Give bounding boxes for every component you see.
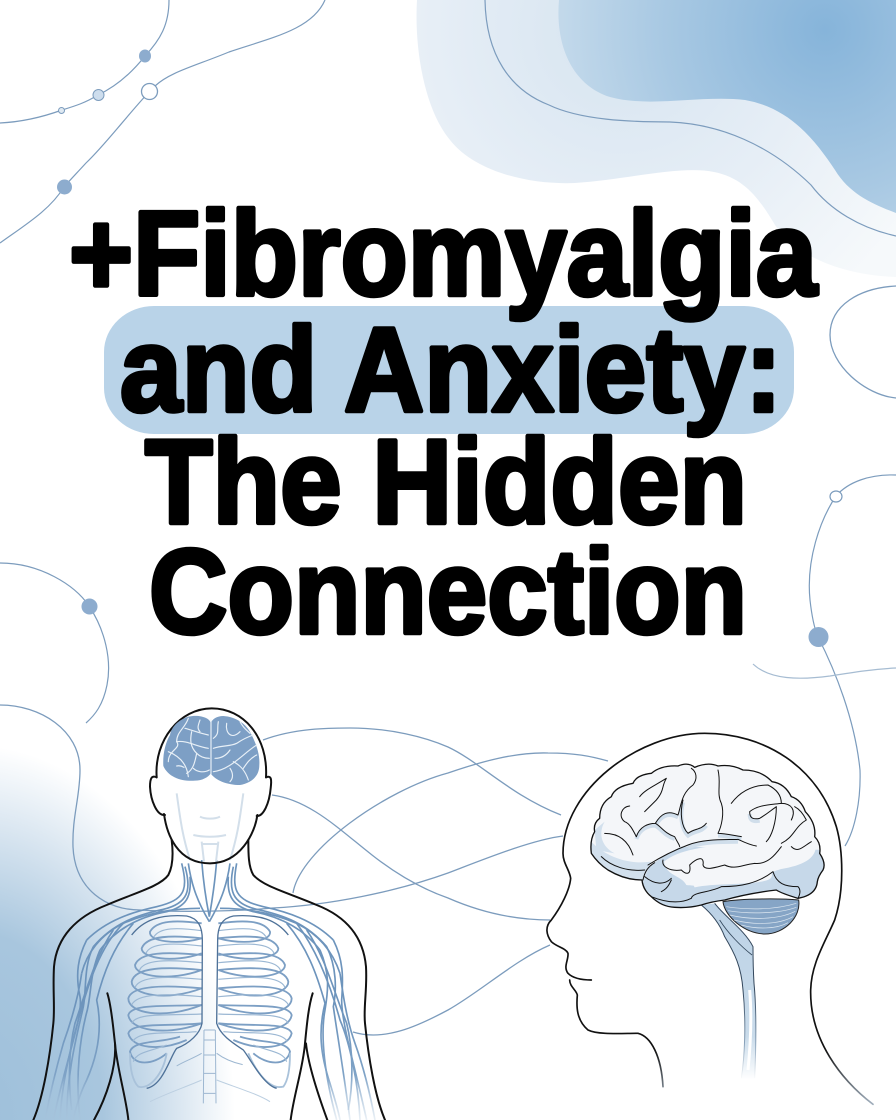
network line and nodes: right lower [753, 475, 896, 846]
connection lines between body and head [0, 705, 608, 1035]
blue wave: top right inner [558, 0, 896, 213]
figure: human body with nervous system [33, 708, 385, 1120]
cerebrum [590, 764, 828, 913]
title: The Hidden [145, 415, 747, 549]
head profile outline [547, 733, 873, 1104]
title: +Fibromyalgia [69, 187, 818, 321]
network lines and nodes: top left [0, 0, 325, 243]
cerebrum outline [591, 764, 824, 908]
network line: top right [485, 0, 896, 236]
figure: head profile with brain [547, 733, 873, 1104]
network line and node: left middle [0, 563, 109, 723]
spine [150, 1030, 270, 1103]
blue wave: top right outer [417, 0, 896, 277]
title: and Anxiety: [120, 303, 782, 437]
network loop: right upper [830, 286, 896, 398]
ribs: right side [218, 921, 292, 1087]
title: Connection [149, 525, 747, 659]
title [69, 187, 818, 659]
nerves: arms [45, 923, 375, 1120]
chest contour and sternum [132, 916, 288, 1088]
nerves: neck and shoulders [82, 860, 340, 973]
gyri lines [601, 768, 811, 902]
title highlight pill [104, 306, 794, 434]
body outline [33, 708, 385, 1120]
brain stem [701, 903, 756, 1078]
brain shading [590, 802, 828, 913]
blue wash: bottom left corner [0, 740, 240, 1120]
ribs: left side [128, 921, 202, 1087]
face details [177, 793, 243, 862]
cerebellum [723, 899, 799, 934]
small brain [163, 716, 259, 785]
